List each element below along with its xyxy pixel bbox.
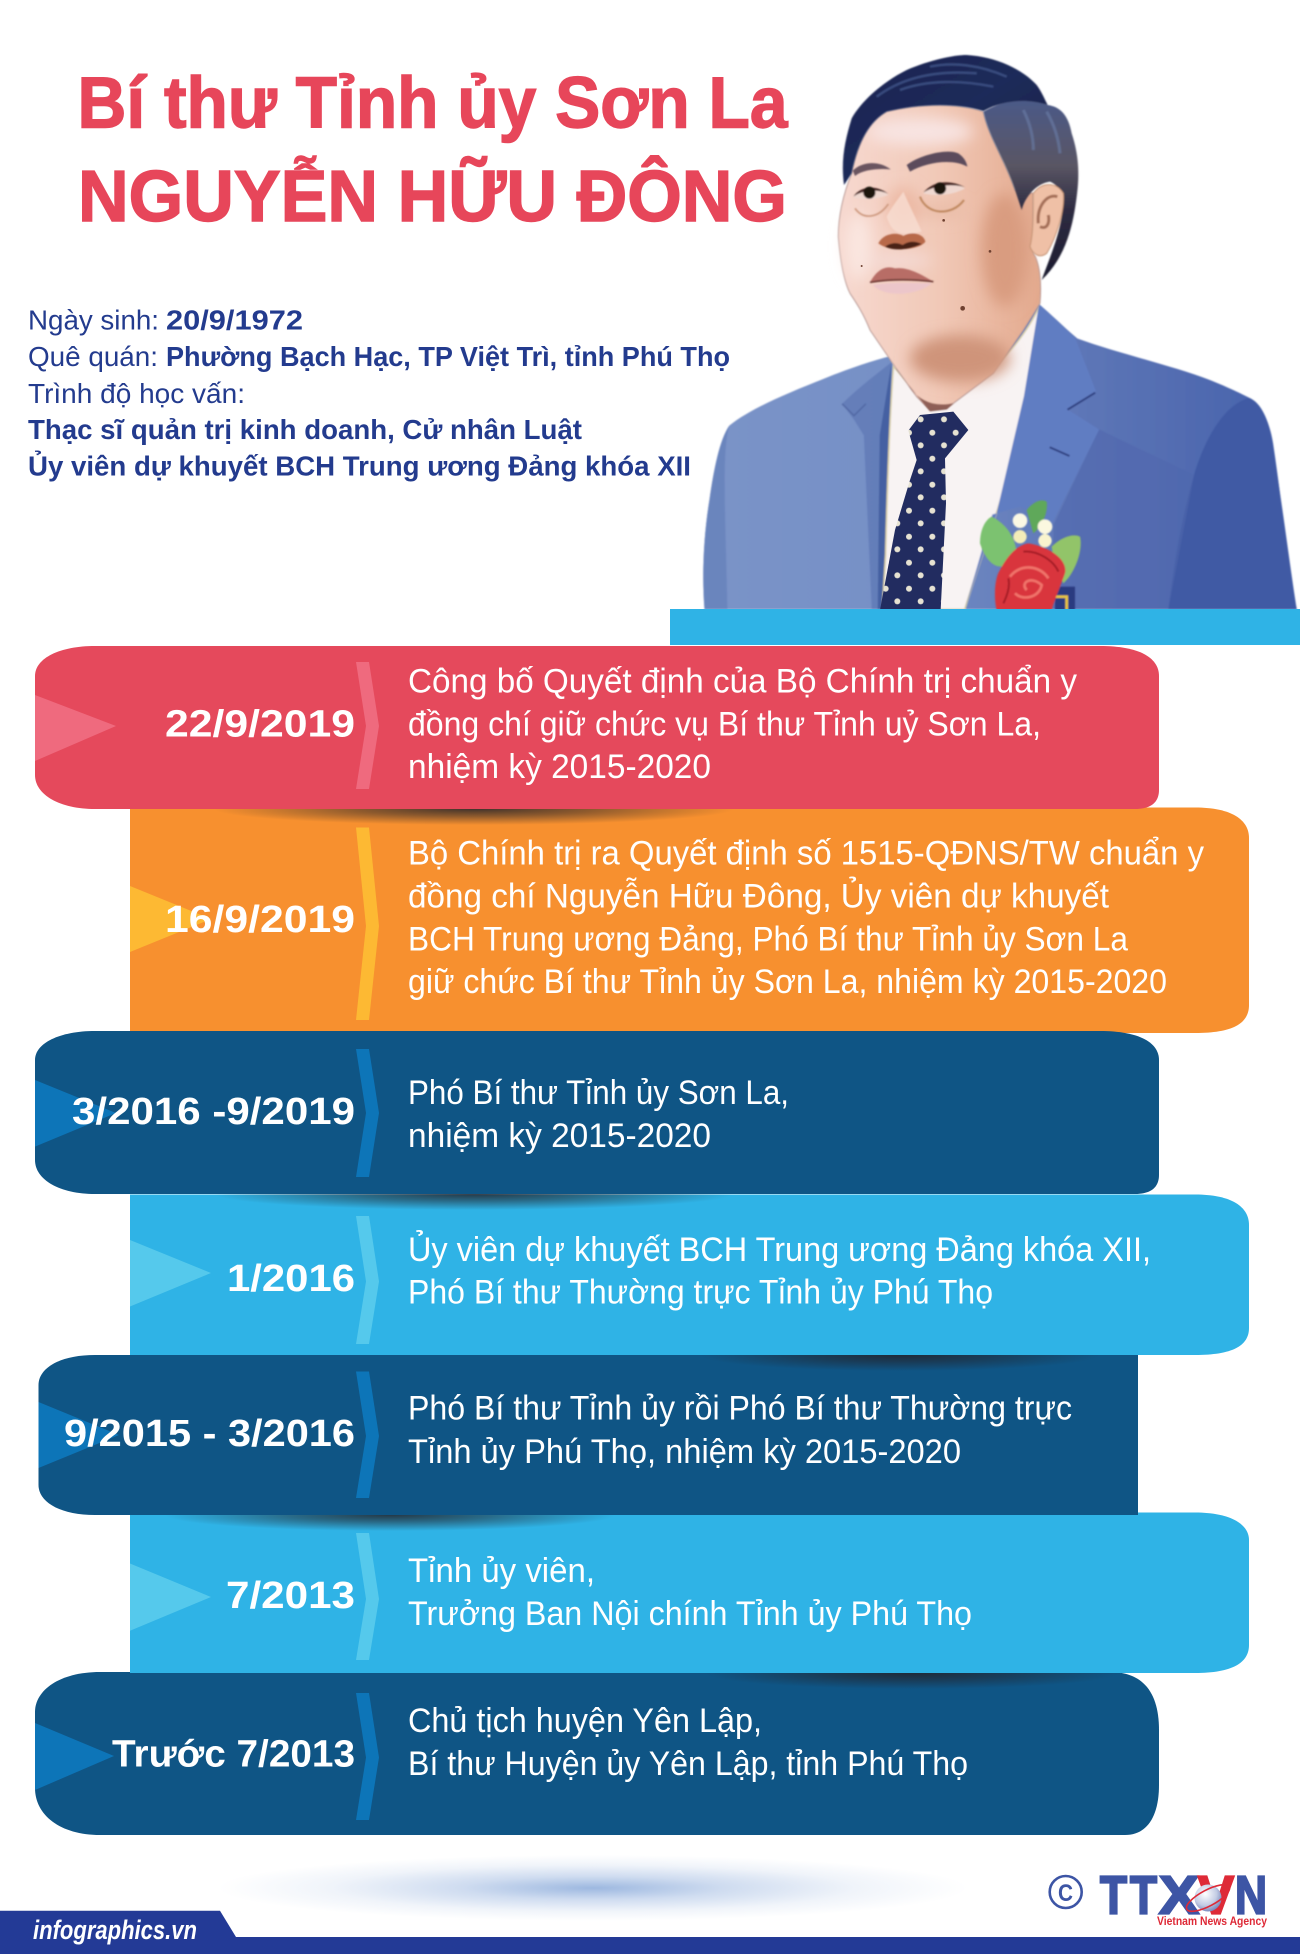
icon: globe [1194,1884,1222,1912]
panel: 9/2015 - 3/2016: Tỉnh ủy Phú Thọ, nhiệm kỳ 2015-2020 [408,1433,961,1471]
panel: 9/2015 - 3/2016: 9/2015 - 3/2016 [64,1413,355,1455]
logo: TTXVN [1100,1866,1268,1928]
eye bags [855,204,888,216]
nose [887,192,922,234]
panel: 16/9/2019: Bộ Chính trị ra Quyết định số 1515-QĐNS/TW chuẩn y [408,834,1205,872]
panel: 1/2016: Ủy viên dự khuyết BCH Trung ương Đảng khóa XII, [408,1229,1151,1269]
ear [1030,185,1064,256]
logo: TTXVN: N [1235,1866,1267,1926]
floor shadow [218,1855,968,1921]
logo: TTXVN: X [1159,1866,1199,1926]
panel: before 7/2013 [35,1672,1159,1835]
panel: 1/2016: 1/2016 [227,1258,355,1300]
degree: Thạc sĩ quản trị kinh doanh, Cử nhân Luật [28,414,582,445]
panel: 22/9/2019: đồng chí giữ chức vụ Bí thư Tỉnh uỷ Sơn La, [408,706,1041,744]
footer bar [0,1911,1300,1954]
head [838,55,1078,411]
panel: 22/9/2019 [35,646,1159,809]
date of birth [28,304,303,336]
panel: 9/2015 - 3/2016: Phó Bí thư Tỉnh ủy rồi Phó Bí thư Thường trực [408,1390,1072,1428]
panel: 3/2016 - 9/2019: Phó Bí thư Tỉnh ủy Sơn La, [408,1074,789,1112]
eyes [853,188,888,199]
jacket [703,303,1297,609]
hometown: Quê quán: [28,341,158,372]
panel: 7/2013: Trưởng Ban Nội chính Tỉnh ủy Phú Thọ [408,1595,972,1633]
panel: 16/9/2019: đồng chí Nguyễn Hữu Đông, Ủy viên dự khuyết [408,876,1109,916]
panel: 22/9/2019: nhiệm kỳ 2015-2020 [408,748,711,786]
neck and face [838,105,1041,410]
tie and brooch [880,412,1081,610]
logo: copyright mark [1050,1876,1082,1908]
title [78,64,788,237]
panel: 16/9/2019: BCH Trung ương Đảng, Phó Bí thư Tỉnh ủy Sơn La [408,920,1129,958]
panel: before 7/2013: Chủ tịch huyện Yên Lập, [408,1702,762,1740]
portrait photo [703,55,1297,610]
title: Bí thư Tỉnh ủy Sơn La [78,64,788,144]
panel: 7/2013 [130,1512,1249,1673]
panel: 3/2016 - 9/2019: nhiệm kỳ 2015-2020 [408,1117,711,1155]
panel: 22/9/2019: 22/9/2019 [165,704,355,746]
panel: 1/2016 [130,1194,1249,1355]
logo: copyright mark: C [1058,1880,1073,1907]
eyebrows [853,163,891,176]
logo: TTXVN: T [1100,1866,1127,1926]
title: NGUYỄN HỮU ĐÔNG [78,156,787,237]
party position: Ủy viên dự khuyết BCH Trung ương Đảng khóa XII [28,450,691,482]
panel: 1/2016: Phó Bí thư Thường trực Tỉnh ủy Phú Thọ [408,1274,993,1312]
logo: TTXVN: V [1198,1866,1234,1926]
tagline: Vietnam News Agency [1157,1916,1268,1928]
flower brooch [980,500,1081,610]
date of birth: Ngày sinh: [28,304,159,336]
panel: 22/9/2019: Công bố Quyết định của Bộ Chính trị chuẩn y [408,663,1078,701]
logo: TTXVN: T [1130,1866,1157,1926]
panel: before 7/2013: Trước 7/2013 [112,1734,355,1776]
panel: 7/2013: Tỉnh ủy viên, [408,1552,595,1590]
website label: infographics.vn [33,1915,197,1945]
panel: before 7/2013: Bí thư Huyện ủy Yên Lập, tỉnh Phú Thọ [408,1745,968,1783]
hometown: Phường Bạch Hạc, TP Việt Trì, tỉnh Phú Thọ [166,341,730,372]
moles [861,219,991,311]
cyan bar under portrait [670,609,1300,645]
panel: 16/9/2019: 16/9/2019 [165,899,355,941]
face shading [845,118,1028,382]
panel: 9/2015 - 3/2016 [38,1355,1138,1515]
date of birth: 20/9/1972 [166,304,303,336]
tie [880,412,968,610]
panel: 3/2016 - 9/2019 [35,1031,1159,1194]
panel: 16/9/2019: giữ chức Bí thư Tỉnh ủy Sơn La, nhiệm kỳ 2015-2020 [408,963,1167,1001]
education: Trình độ học vấn: [28,378,245,409]
neck shadow [908,385,953,411]
mouth [870,267,933,282]
panel: 3/2016 - 9/2019: 3/2016 -9/2019 [72,1091,355,1133]
panel: 16/9/2019 [130,808,1249,1033]
hair top [843,55,1048,185]
panel: 7/2013: 7/2013 [226,1575,355,1617]
info block [28,304,730,482]
hair back and side [983,100,1078,280]
